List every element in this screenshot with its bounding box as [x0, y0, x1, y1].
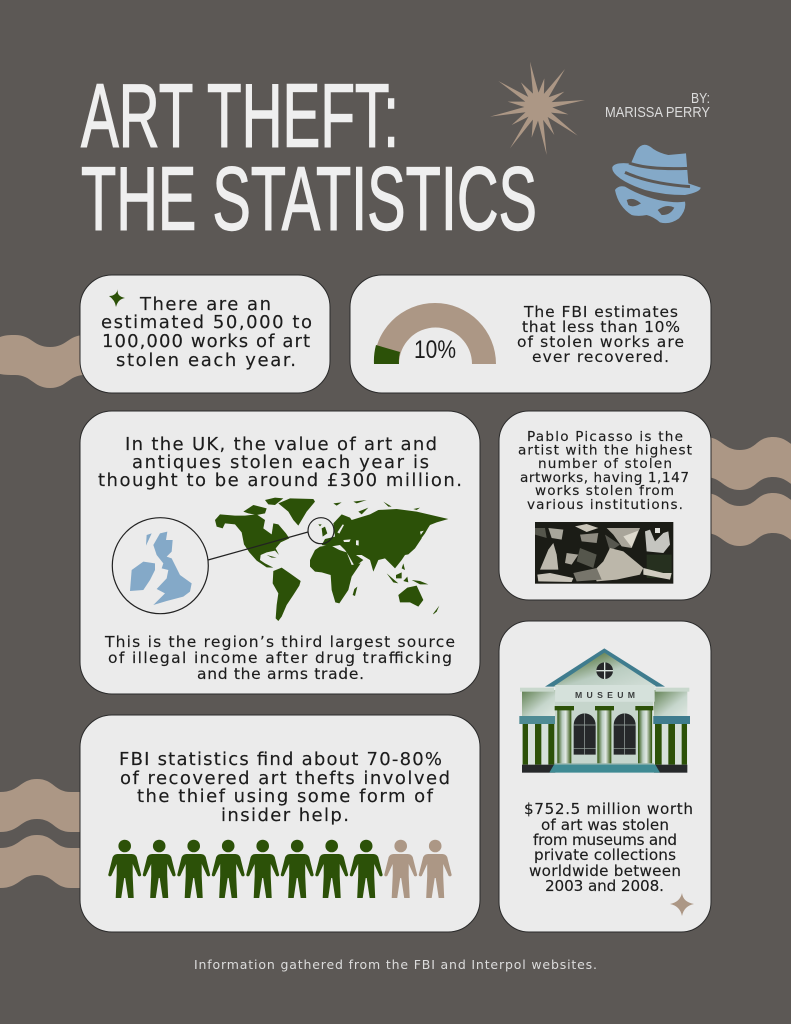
panel: insider help [80, 715, 480, 932]
text: illegal income [104, 633, 455, 683]
panel: FBI recovery [350, 275, 711, 393]
title: ART THEFT: [81, 66, 399, 166]
panel: stolen each year [80, 275, 330, 393]
text: FBI recovery: ever recovered. [532, 348, 669, 366]
text: stolen each year: There are an [139, 294, 271, 315]
text: museum statistic: worldwide between [529, 862, 681, 880]
heading text: UK value [98, 434, 462, 491]
icon: museum building: MUSEUM [575, 690, 635, 700]
inset circle with UK map [112, 518, 334, 614]
text: museum statistic [524, 800, 693, 895]
text: insider help: the thief using some form of [137, 786, 434, 807]
text: museum statistic: $752.5 million worth [524, 800, 693, 818]
icon: detective hat and mask [612, 145, 701, 223]
panel: museum [499, 621, 711, 932]
decorative wave left top [0, 335, 85, 388]
text: stolen each year: 100,000 works of art [102, 331, 310, 352]
icon: tan sparkle [670, 893, 694, 916]
text: FBI recovery [517, 303, 684, 366]
heading text: UK value: thought to be around £300 million. [98, 470, 462, 491]
text: museum statistic: of art was stolen [541, 816, 669, 834]
title [81, 66, 537, 250]
text: insider help: insider help. [221, 805, 349, 826]
text: illegal income: This is the region’s third largest source [104, 633, 455, 651]
panel: Picasso [499, 411, 711, 600]
world map [215, 498, 448, 621]
text: Picasso: Pablo Picasso is the [527, 429, 683, 445]
heading text: UK value: In the UK, the value of art and [125, 434, 437, 455]
pictogram: 8 of 10 people [108, 840, 452, 898]
text: insider help: of recovered art thefts involved [120, 768, 450, 789]
heading text: UK value: antiques stolen each year is [132, 452, 429, 473]
gauge chart [374, 303, 496, 364]
text: stolen each year [101, 294, 312, 371]
panel: UK value [80, 411, 480, 694]
text: illegal income: and the arms trade. [197, 665, 364, 683]
byline: BY: [691, 91, 710, 107]
text: stolen each year: stolen each year. [116, 350, 296, 371]
text: museum statistic: private collections [534, 846, 676, 864]
icon: museum building [519, 648, 690, 773]
footer source note: Information gathered from the FBI and Interpol websites. [194, 957, 597, 972]
gauge chart: 10% [414, 336, 456, 364]
decorative waves right [705, 437, 791, 546]
text: FBI recovery: that less than 10% [522, 318, 680, 336]
title: THE STATISTICS [81, 150, 537, 250]
text: insider help [119, 749, 450, 826]
byline: MARISSA PERRY [605, 105, 710, 121]
text: illegal income: of illegal income after drug trafficking [108, 649, 452, 667]
text: Picasso: artworks, having 1,147 [520, 470, 689, 486]
text: FBI recovery: The FBI estimates [523, 303, 678, 321]
text: Picasso: number of stolen [538, 456, 672, 472]
text: museum statistic: 2003 and 2008. [545, 877, 664, 895]
text: stolen each year: estimated 50,000 to [101, 312, 312, 333]
icon: sunburst [490, 62, 585, 155]
text: FBI recovery: of stolen works are [517, 333, 684, 351]
text: Picasso: works stolen from [535, 483, 674, 499]
text: insider help: FBI statistics find about 70-80% [119, 749, 442, 770]
text: Picasso: artist with the highest [518, 442, 692, 458]
decorative waves left bottom [0, 779, 85, 888]
byline [605, 91, 710, 121]
text: Picasso [518, 429, 692, 513]
text: museum statistic: from museums and [533, 831, 677, 849]
painting: Guernica [535, 522, 673, 584]
text: Picasso: various institutions. [527, 497, 683, 513]
icon: green sparkle [109, 289, 125, 307]
